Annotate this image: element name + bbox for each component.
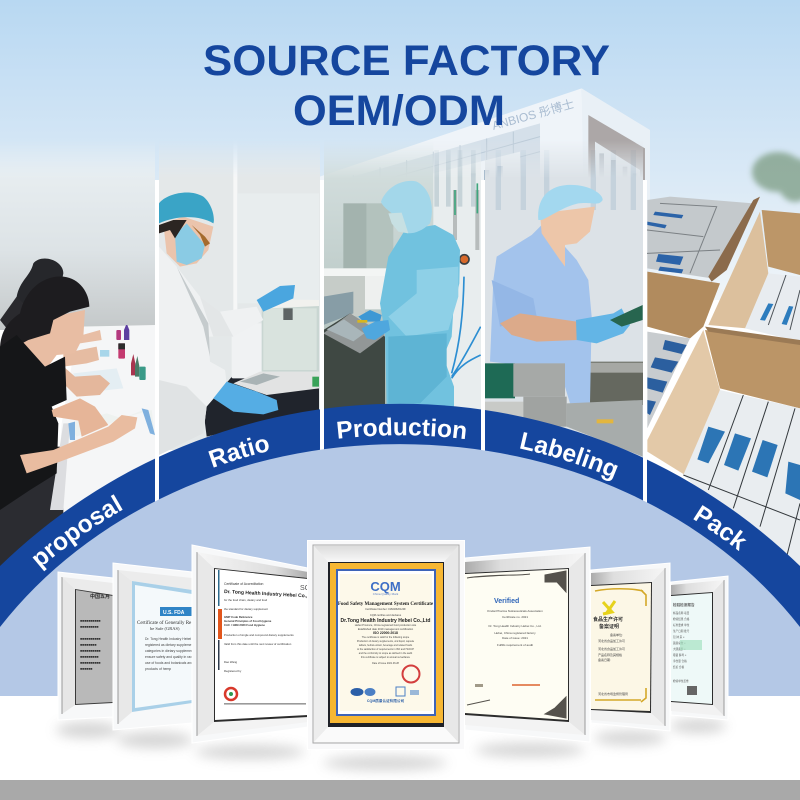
upper right carton: [708, 210, 800, 342]
certificate frame 3: Certificate of Accreditation: [224, 582, 264, 586]
worker shirt: [490, 225, 592, 403]
certificate frame 1: ■■■■■■: [80, 667, 92, 671]
factory building: [280, 88, 650, 287]
lower carton: [647, 327, 800, 583]
certificate frame R3: Date of issue: 2021: [502, 636, 528, 640]
certificate frame R3: Kindai Pharma Nutraceuticals Association: [487, 609, 543, 613]
certificate frame R3: Hebei, China registered factory: [494, 631, 536, 635]
certificate frame 2: registered as dietary supplement with: [145, 643, 201, 647]
certificate frame 2: categories in dietary supplements: [145, 649, 196, 653]
certificate frame 2: products of hemp: [145, 667, 171, 671]
certificate frame R2: 河北省市场监督管理局: [598, 691, 628, 696]
certificate frame R2: 河北省食品加工许可: [598, 638, 625, 643]
lab coat: [159, 247, 264, 422]
certificate body: to the satisfaction of requirements in ISO and HACCP: [357, 648, 414, 651]
title line 1: SOURCE FACTORY: [203, 37, 610, 85]
bottom gray bar: [0, 780, 800, 800]
certificate frame 1: 中国五月: [90, 593, 110, 600]
front participant: [0, 277, 137, 510]
light blue dome: [0, 444, 800, 696]
hair and cap: [159, 220, 187, 238]
red seal: [402, 666, 420, 682]
label: pack: Pack: [693, 505, 746, 551]
white floor: [0, 690, 800, 780]
certificate frame R1: 样品名称 项目: [673, 611, 690, 615]
certificate body: Dr.Tong Health Industry Hebei Co.,Ltd: [341, 618, 430, 624]
certificate frame 1: ■■■■■■■■■: [80, 655, 98, 659]
gloves: [257, 285, 295, 312]
certificate frame 2: Dr. Tong Health Industry Hebei Co., Ltd.: [145, 637, 205, 641]
certificate frame 3: Dr. Tong Health Industry Hebei Co., Ltd.: [224, 589, 319, 600]
glasses: [192, 225, 210, 247]
certificate frame R2: 备案单位:: [610, 632, 623, 637]
certificate body: Hebei Province, China registered food production site: [355, 623, 417, 627]
certificate frame 2: be Safe (GRAS): [150, 626, 180, 631]
label: ratio: Ratio: [208, 438, 269, 468]
certificate frame R3: Fulfills requirement of audit: [497, 643, 533, 647]
arc banner: [0, 404, 800, 696]
certificate body: Production of dietary supplements, oral liquid, capsule: [357, 640, 415, 643]
certificate frame R2: 食品生产许可: [593, 616, 623, 623]
certificate body: and the conformity to scope as defined in the audit: [359, 652, 413, 655]
certificate frame 1: ■■■■■■■■■■: [80, 649, 100, 653]
certificate frame R3: Verified: [494, 598, 519, 605]
certificate frame center: China Quality Mark: [373, 592, 399, 596]
certificate body: Certificate Number: 01821B20123F: [365, 607, 406, 611]
certificate frame 3: Dao Wang: [224, 660, 238, 664]
main title: [203, 37, 610, 135]
certificate frame R1: 大肠菌群 ≤: [673, 647, 686, 651]
certificate title: Food Safety Management System Certificate: [338, 602, 434, 607]
certificate frame R3: [465, 547, 590, 742]
certificate frame 3: CAC / 1969 2020 Food Hygiene: [224, 623, 265, 627]
label: production: Production: [337, 418, 466, 439]
certificate frame R1: 检验结果 合格: [673, 617, 690, 621]
forearm: [500, 313, 577, 342]
accreditation badges: CQM质量认证有限公司: [367, 698, 404, 703]
certificate body: ISO 22000:2018: [373, 631, 398, 635]
certificate frame R2: 产品名称及其规格: [598, 652, 622, 657]
certificate frame 3: for the food chain, dietary and food: [224, 598, 268, 602]
certificate frame 2: ensure safety and quality in raw: [145, 655, 193, 659]
certificate frame R3: Dr. Tong Health Industry Hebei Co., Ltd.: [489, 624, 542, 628]
certificate body: [341, 607, 430, 665]
certificate frame R1: 检验检测报告: [673, 602, 695, 607]
certificate frame 3: GMP Code Reference: [224, 615, 253, 619]
middle left carton: [647, 272, 720, 428]
banner labels: [32, 418, 746, 572]
certificate frame 3: [192, 545, 319, 743]
bench: [203, 375, 319, 437]
certificate frame R1: 标准要求 单位: [673, 623, 690, 627]
head and neck: [540, 207, 595, 267]
certificate frame 2: use of foods and botanicals and: [145, 661, 193, 665]
certificate frame center: [308, 540, 464, 750]
pipes: [452, 183, 481, 378]
accreditation badges: [350, 687, 419, 703]
certificate frame R1: 铅 砷 汞 ≤: [673, 635, 685, 639]
certificate frame R3: Certificate no. 2021: [502, 615, 528, 619]
rear participants: [0, 259, 110, 397]
hair cap: [538, 185, 603, 220]
neck and face: [163, 217, 213, 267]
tree: [752, 152, 800, 202]
glove: [576, 308, 630, 343]
certificate body: Established date 2019 management certification: [358, 627, 414, 631]
certificate frame R2: [591, 563, 670, 731]
title line 2: OEM/ODM: [293, 87, 505, 135]
certificate frame 3: Production of single and compound dietary supplements: [224, 633, 294, 637]
bottles: [116, 325, 146, 380]
sky background: [0, 0, 800, 300]
certificate body: The certificate is valid for the following scope: [362, 636, 410, 639]
certificate frame 1: ■■■■■■■■■■: [80, 619, 100, 623]
certificate body: tablets, herbal extract, beverage and related foods: [359, 644, 413, 647]
certificate frame 1: ■■■■■■■■■: [80, 625, 98, 629]
gloves: [358, 310, 382, 322]
certificate frame R1: 检验单位盖章: [673, 679, 689, 683]
certificate frame 2: Certificate of Generally Recog: [137, 621, 199, 626]
certificate frame 2: U.S. FDA: [163, 610, 185, 616]
certificate frame R1: 霉菌 酵母 ≤: [673, 653, 687, 657]
frame shadows: [56, 719, 726, 770]
certificate frame R1: 净含量 合格: [673, 659, 687, 663]
certificate frame 3: Registered by: [224, 669, 242, 673]
package stacks: [485, 363, 643, 457]
certificate frame 3: General Principles of Food Hygiene: [224, 619, 272, 623]
certificate frame 1: ■■■■■■■■■■: [80, 661, 100, 665]
certificate frame 2: [112, 562, 192, 730]
certificate frame 1: ■■■■■■■■■■: [80, 637, 100, 641]
certificate frame R2: 备案证明: [599, 623, 619, 630]
certificate frame 1: ■■■■■■■■: [80, 643, 96, 647]
certificate frame R1: 结论 合格: [673, 665, 685, 669]
certificate frame R1: [671, 576, 728, 720]
certificate frame R1: 生产日期 批号: [673, 629, 690, 633]
certificate body: CQM certifies and declares: [370, 613, 402, 617]
certificate frame R1: 菌落总数 ≤: [673, 641, 686, 645]
face mask: [175, 223, 205, 265]
panel: pack photo: [647, 197, 800, 583]
balance instrument: [232, 299, 319, 395]
label: labeling: Labeling: [520, 432, 618, 481]
certificate frame 1: [58, 572, 113, 720]
panel: labeling photo: [483, 130, 647, 463]
certification mark: [224, 688, 306, 705]
panel: ratio photo: [157, 130, 323, 455]
building sign: ANBIOS 彤博士: [490, 96, 576, 133]
hood: [381, 181, 432, 233]
certificate frame R2: 备案日期:: [598, 657, 611, 662]
certificate frame 3: Valid from this date until the next review of certification: [224, 642, 292, 646]
certificate body: Date of Issue 2021.06.28: [372, 662, 400, 665]
dividers between photos: [155, 180, 647, 520]
certificate frame 3: SG: [300, 585, 310, 592]
cleanroom suit: [380, 225, 460, 407]
certificate body: this certificate is subject to annual surveillance: [361, 656, 411, 659]
panel: proposal photo: [0, 156, 155, 566]
certificate frame R2: 河北省食品加工许可: [598, 646, 625, 651]
upper left carton: [647, 197, 760, 282]
panel: production photo: [324, 147, 481, 410]
certificate frame 3: the standard for dietary supplement: [224, 607, 268, 611]
control console: [323, 313, 385, 410]
CQM logo: CQM: [370, 579, 401, 594]
label: proposal: proposal: [32, 494, 123, 572]
